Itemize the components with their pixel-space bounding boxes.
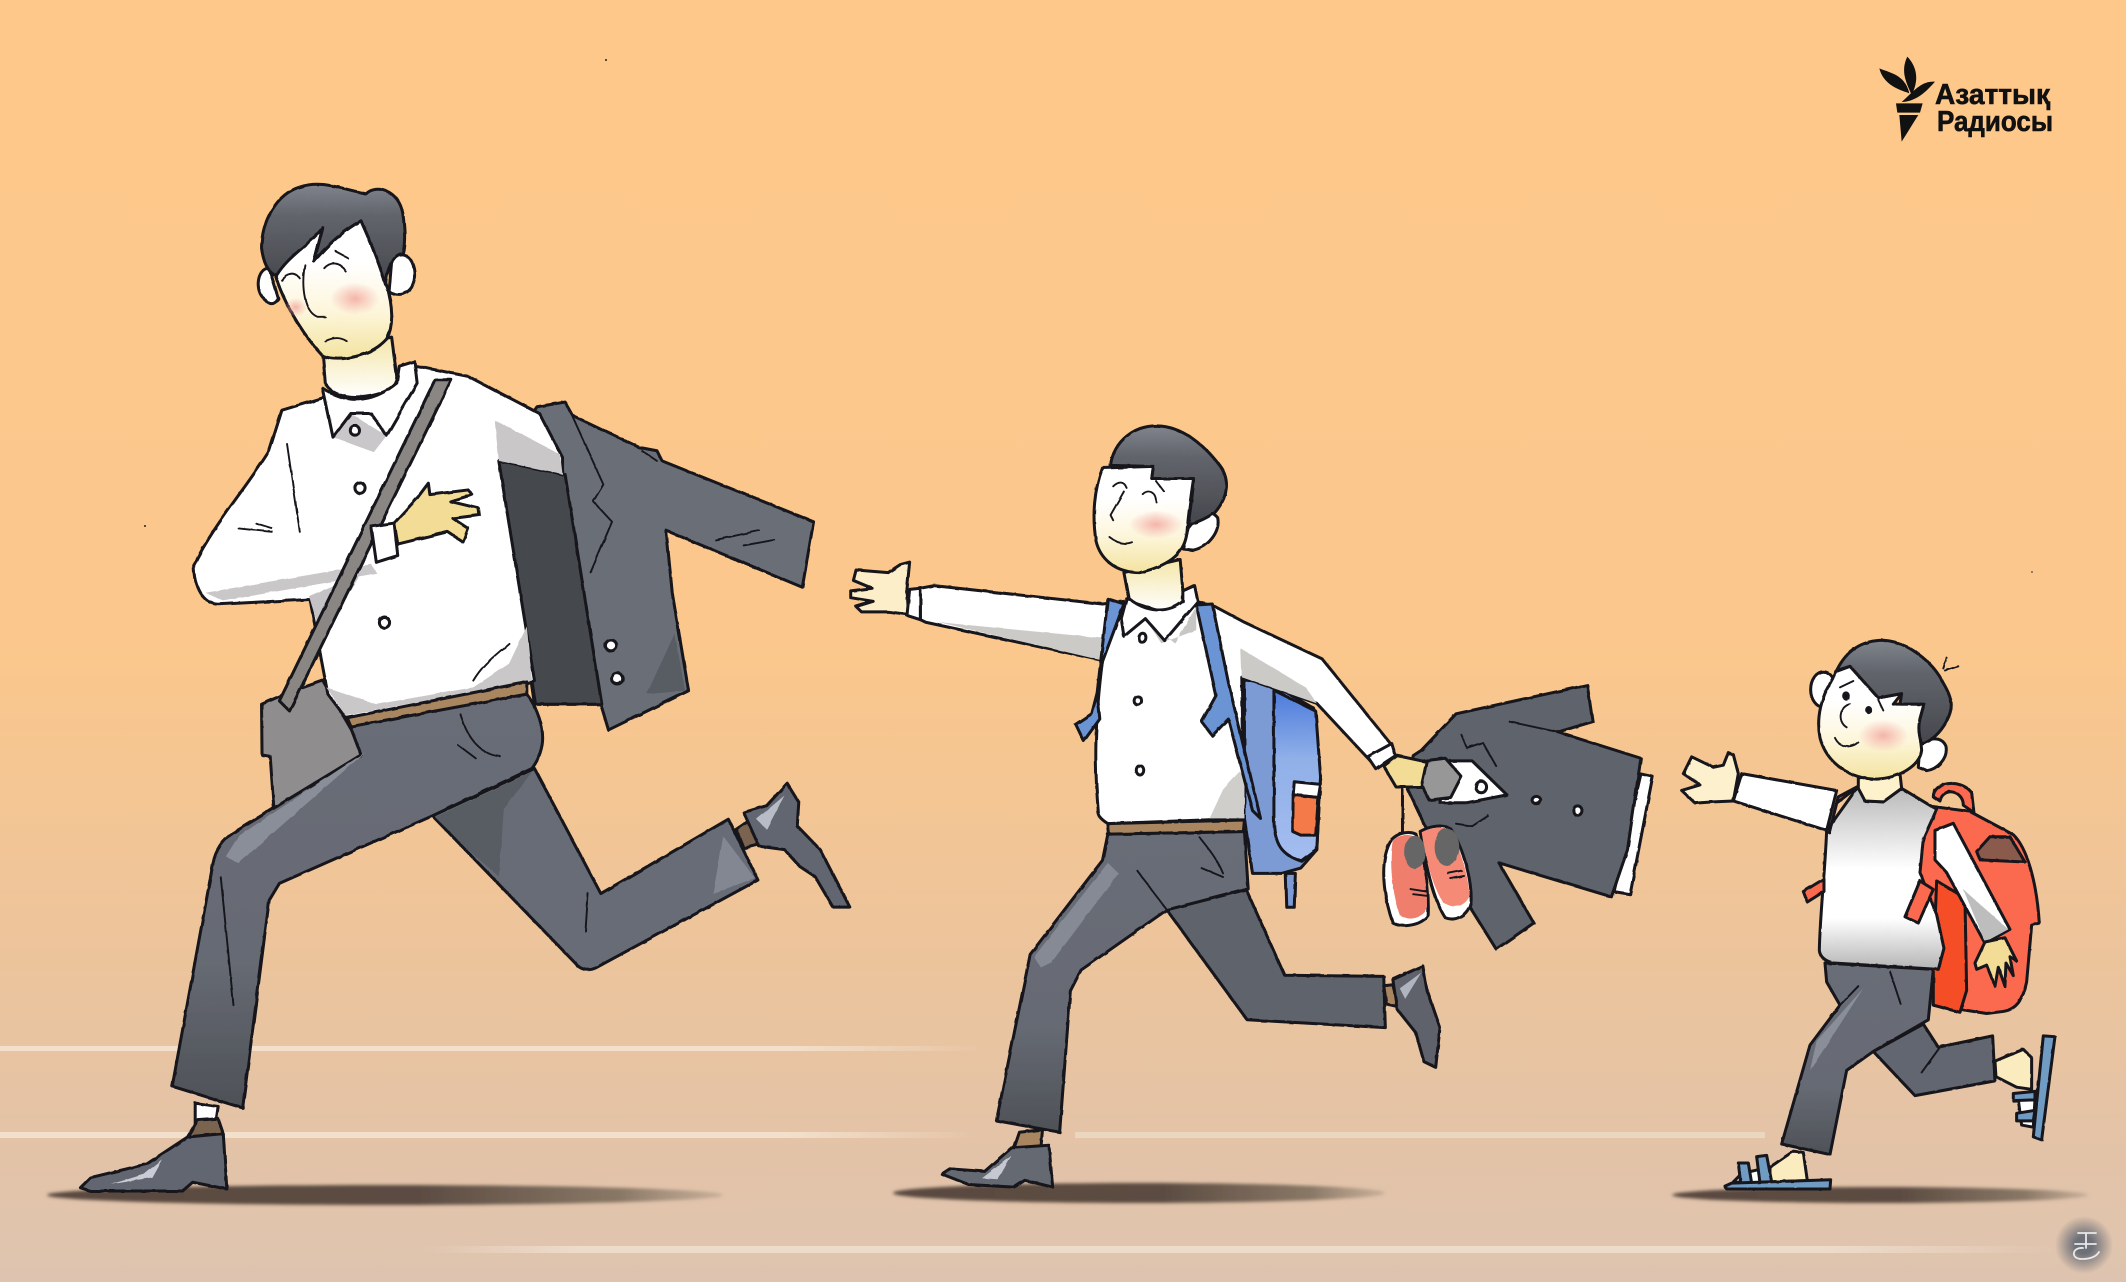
logo: wordmark: Радиосы xyxy=(1937,106,2053,138)
ears xyxy=(258,254,415,304)
lower hand xyxy=(1975,938,2017,986)
back shoe xyxy=(736,783,850,907)
figure: adult man running xyxy=(80,184,850,1191)
belt xyxy=(347,682,527,727)
jacket slung over shoulder xyxy=(498,402,814,730)
logo: torch icon xyxy=(1879,57,1935,142)
carried jacket xyxy=(1408,685,1653,949)
ground shadow: man xyxy=(47,1185,723,1205)
figure: teenager running xyxy=(851,426,1653,1187)
right sleeve xyxy=(1935,823,2010,943)
ground shadow: teenager xyxy=(893,1183,1385,1203)
shoulder strap xyxy=(279,380,451,711)
front leg xyxy=(172,694,588,1108)
red backpack xyxy=(1920,783,2039,1014)
back shoe xyxy=(1384,966,1440,1067)
artist signature mark xyxy=(2055,1216,2113,1274)
face xyxy=(274,221,392,359)
track lines xyxy=(0,1046,2060,1253)
hair xyxy=(262,184,405,285)
white shirt xyxy=(194,366,563,718)
blue backpack xyxy=(1244,680,1321,907)
front leg xyxy=(996,831,1248,1132)
hand on chest xyxy=(394,483,479,544)
reaching hand xyxy=(851,562,910,614)
back leg xyxy=(1167,860,1385,1028)
shirt collar xyxy=(323,337,417,628)
hanging red shoes xyxy=(1384,790,1471,926)
backpack straps xyxy=(1803,786,1933,923)
belt xyxy=(1108,820,1244,834)
head xyxy=(1094,426,1226,573)
paper specks xyxy=(144,59,2033,573)
cuffs xyxy=(907,588,1396,769)
front shoe xyxy=(942,1130,1053,1187)
backpack straps xyxy=(1076,599,1261,818)
figure: child running xyxy=(1682,640,2055,1189)
collar and buttons xyxy=(1121,560,1198,775)
messenger bag xyxy=(262,681,366,814)
back leg xyxy=(1873,1024,1995,1096)
head xyxy=(1811,640,1958,779)
front shoe xyxy=(80,1103,227,1191)
left sleeve xyxy=(1733,774,1837,830)
back foot and sandal xyxy=(1995,1036,2055,1140)
neck xyxy=(1858,774,1902,802)
t-shirt xyxy=(1819,786,1944,969)
shirt xyxy=(920,586,1392,824)
ground shadow: child xyxy=(1672,1187,2088,1203)
logo: wordmark: Азаттық xyxy=(1935,79,2050,111)
gripping hand xyxy=(1384,756,1427,787)
shirt cuff xyxy=(371,523,398,562)
front leg xyxy=(1782,963,1940,1155)
back leg xyxy=(432,768,758,970)
front foot and sandal xyxy=(1725,1151,1831,1189)
reaching hand xyxy=(1682,753,1738,803)
